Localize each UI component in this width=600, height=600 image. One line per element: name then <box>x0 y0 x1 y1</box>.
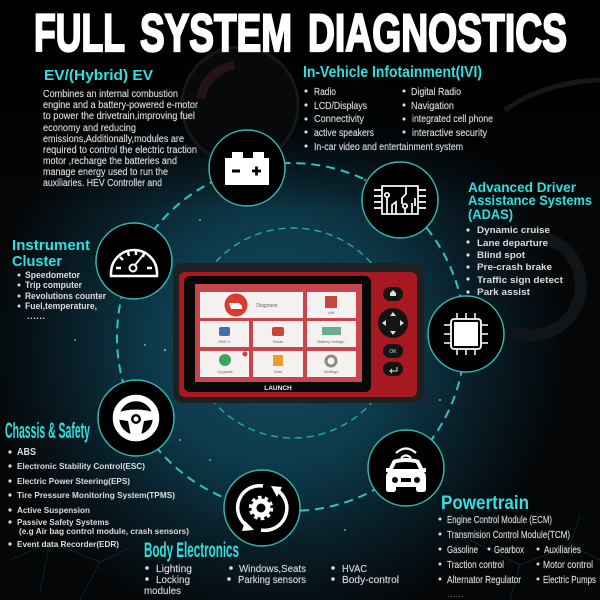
scan tool device <box>173 263 424 403</box>
panel: instrument cluster <box>12 237 106 321</box>
list: chassis items: Active Suspension <box>17 505 90 515</box>
list: powertrain items: Gearbox <box>494 544 525 556</box>
heading: ADAS: Assistance Systems <box>468 192 592 208</box>
list: cluster items: Fuel,temperature, <box>25 301 97 311</box>
list: IVI items: Radio <box>314 87 336 98</box>
icon: gear with arrows <box>224 470 300 546</box>
heading: powertrain: Powertrain <box>441 493 529 514</box>
icon: gauge <box>96 223 172 299</box>
panel: infotainment <box>303 64 493 153</box>
text block: EV description: motor ,recharge the batteries and <box>43 156 177 167</box>
list: ADAS items: Pre-crash brake <box>477 262 552 273</box>
heading: IVI: In-Vehicle Infotainment(IVI) <box>303 64 482 81</box>
icon: steering wheel <box>98 380 174 456</box>
list: chassis items: Electronic Stability Control(ESC) <box>17 461 145 471</box>
text block: EV description: auxiliaries. HEV Controller and <box>43 178 162 189</box>
list: cluster items <box>18 270 106 321</box>
list: ADAS items: Traffic sign detect <box>477 275 564 286</box>
list: IVI items <box>304 87 493 153</box>
device buttons: OK <box>389 349 397 355</box>
list: IVI items: active speakers <box>314 128 374 139</box>
list: ADAS items: Park assist <box>477 287 531 298</box>
panel: body electronics <box>144 539 399 597</box>
list: powertrain items: ...... <box>448 593 464 599</box>
list: powertrain items: Auxiliaries <box>544 544 581 556</box>
panel: chassis and safety <box>5 418 189 549</box>
list: cluster items: Speedometor <box>25 270 80 280</box>
device screen: Settings <box>324 369 338 374</box>
device screen: Diagnose <box>256 303 278 309</box>
panel: ADAS <box>466 179 592 298</box>
text block: EV description: engine and a battery-powered e-motor <box>43 100 199 111</box>
list: body items: Lighting <box>156 563 192 575</box>
text block: EV description: Combines an internal combustion <box>43 89 178 100</box>
text block: EV description: emissions,Additionally,modules are <box>43 134 184 145</box>
icon: battery <box>209 130 285 206</box>
list: powertrain items: Engine Control Module (ECM) <box>447 514 552 526</box>
list: body items: Windows,Seats <box>239 563 306 575</box>
text block: EV description: economy and reducing <box>43 123 136 134</box>
list: chassis items: Passive Safety Systems <box>17 517 109 527</box>
device red body <box>179 272 417 397</box>
device screen: Reset <box>273 339 284 344</box>
list: body items: Parking sensors <box>238 574 306 586</box>
device screen: LIM <box>328 310 334 315</box>
device screen: Data <box>274 369 283 374</box>
list: chassis items: ABS <box>17 447 36 458</box>
list: body items: Body-control <box>342 574 399 586</box>
list: body items: modules <box>144 585 181 597</box>
inner dashed ring <box>188 228 398 438</box>
heading: ADAS <box>468 179 592 222</box>
title <box>34 4 567 63</box>
list: IVI items: interactive security <box>412 128 487 139</box>
device screen: Battery Voltage <box>317 339 345 344</box>
list: ADAS items: Lane departure <box>477 238 548 249</box>
list: cluster items: ...... <box>27 311 45 321</box>
text block: EV description: manage energy used to run the <box>43 167 168 178</box>
heading: instrument cluster <box>12 237 90 270</box>
list: powertrain items: Gasoline <box>447 544 478 556</box>
device black bezel <box>184 276 371 392</box>
text block: EV description: to power the drivetrain,improving fuel <box>43 111 195 122</box>
list: ADAS items: Blind spot <box>477 250 526 261</box>
list: IVI items: Navigation <box>411 101 454 112</box>
list: powertrain items: Traction control <box>447 559 504 571</box>
text block: EV description <box>43 89 199 189</box>
heading: instrument cluster: Cluster <box>12 253 62 270</box>
device buttons <box>378 287 408 376</box>
heading: ADAS: (ADAS) <box>468 206 513 222</box>
list: IVI items: integrated cell phone <box>412 114 493 125</box>
text block: EV description: required to control the electric traction <box>43 145 197 156</box>
list: ADAS items: Dynamic cruise <box>477 225 550 236</box>
list: chassis items <box>8 447 189 549</box>
device screen: OBD II <box>218 339 230 344</box>
icon: connected car <box>368 430 444 506</box>
device screen: Upgrade <box>217 369 233 374</box>
list: chassis items: (e.g Air bag control module, crash sensors) <box>19 526 189 536</box>
list: chassis items: Event data Recorder(EDR) <box>17 539 119 549</box>
panel: EV <box>43 67 199 189</box>
list: chassis items: Tire Pressure Monitoring System(TPMS) <box>17 490 175 500</box>
list: ADAS items <box>466 225 564 298</box>
device screen <box>195 284 362 382</box>
list: IVI items: Connectivity <box>314 114 364 125</box>
dashed connection ring <box>117 163 465 511</box>
list: cluster items: Trip computer <box>25 280 82 290</box>
heading: ADAS: Advanced Driver <box>468 179 577 195</box>
device bumper <box>173 263 424 403</box>
list: IVI items: Digital Radio <box>411 87 461 98</box>
heading: body electronics: Body Electronics <box>144 539 239 562</box>
panel: powertrain <box>438 493 596 599</box>
list: powertrain items: Alternator Regulator <box>447 574 521 586</box>
title: SYSTEM <box>140 4 292 63</box>
list: chassis items: Electric Power Steering(EPS) <box>17 476 130 486</box>
list: body items: Locking <box>156 574 190 586</box>
icon: chip <box>428 296 504 372</box>
icon: circuit board <box>362 162 438 238</box>
device brand: LAUNCH <box>264 385 292 392</box>
list: body items: HVAC <box>342 563 367 575</box>
list: body items <box>144 563 399 597</box>
heading: instrument cluster: Instrument <box>12 237 90 254</box>
title: FULL <box>34 4 125 63</box>
list: cluster items: Revolutions counter <box>25 291 106 301</box>
heading: EV: EV/(Hybrid) EV <box>44 67 153 84</box>
list: IVI items: In-car video and entertainment system <box>314 142 463 153</box>
list: powertrain items <box>438 514 596 599</box>
panel: chassis and safety: Chassis & Safety <box>5 418 90 443</box>
list: IVI items: LCD/Displays <box>314 101 367 112</box>
